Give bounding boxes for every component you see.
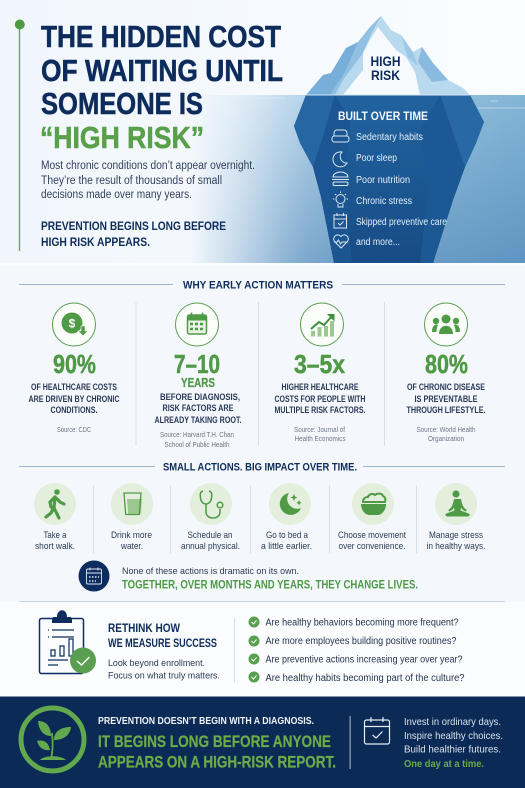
stat: 90%: ARE DRIVEN BY CHRONIC [28, 394, 120, 404]
action: stress [426, 483, 486, 552]
heading: rethink: WE MEASURE SUCCESS [108, 638, 217, 650]
text: look beyond enrollment: Focus on what truly matters. [108, 670, 220, 682]
item: preventive actions: Are preventive actions increasing year over year? [266, 654, 463, 666]
stat: 7-10 years: 7–10 [174, 349, 220, 379]
callout: together: None of these actions is dramatic on its own. [122, 566, 299, 577]
closing message: One day at a time. [404, 758, 484, 770]
label: high risk [370, 54, 400, 83]
prevention statement: HIGH RISK APPEARS. [41, 237, 150, 249]
closing message: Inspire healthy choices. [404, 730, 503, 742]
iceberg [245, 16, 525, 263]
icon: stethoscope [190, 483, 232, 525]
heading: rethink: RETHINK HOW [108, 623, 180, 635]
stat: 7-10 years: School of Public Health [164, 442, 230, 449]
stat: 7-10 years: Source: Harvard T.H. Chan [160, 432, 234, 439]
title: THE HIDDEN COST [41, 19, 281, 54]
stat: 90%: Source: CDC [57, 427, 91, 434]
closing headline: APPEARS ON A HIGH-RISK REPORT. [98, 752, 336, 772]
stat: 3-5x: HIGHER HEALTHCARE [282, 382, 358, 392]
icon: dollar down: $ [69, 316, 76, 330]
action: walk: short walk. [35, 541, 75, 552]
icon: calendar badge [78, 560, 110, 592]
item: sedentary habits: Sedentary habits [356, 132, 423, 143]
water background [190, 95, 525, 263]
intro text: Most chronic conditions don’t appear overnight. [41, 160, 255, 172]
action: water [111, 483, 153, 552]
stat: 7-10 years: RISK FACTORS ARE [162, 403, 234, 413]
item: poor nutrition: Poor nutrition [356, 175, 410, 186]
action: physical: Schedule an [188, 530, 232, 541]
closing headline: PREVENTION DOESN’T BEGIN WITH A DIAGNOSIS. [98, 715, 314, 727]
heading: rethink [108, 623, 217, 650]
stat: 80%: Organization [428, 436, 464, 443]
icon: calendar [176, 303, 218, 346]
panel: footer [0, 696, 525, 788]
stat: 3-5x: COSTS FOR PEOPLE WITH [274, 394, 366, 404]
icon: moon and stars [269, 483, 311, 525]
stat: 3-5x [274, 303, 366, 443]
label: high risk: HIGH [370, 54, 400, 69]
stat: 80% [406, 303, 486, 443]
item: poor sleep: Poor sleep [356, 153, 397, 164]
item: healthy habits: Are healthy habits becoming part of the culture? [266, 673, 465, 684]
closing headline: IT BEGINS LONG BEFORE ANYONE [98, 732, 331, 751]
callout: together: TOGETHER, OVER MONTHS AND YEARS, THEY CHANGE LIVES. [122, 580, 418, 592]
callout: together [78, 560, 418, 592]
stat: 80%: IS PREVENTABLE [414, 394, 478, 404]
action: sleep: a little earlier. [261, 541, 312, 552]
stat: 80%: 80% [425, 349, 468, 379]
panel: rethink success [0, 602, 525, 697]
icon: sprout in ring [21, 708, 84, 771]
stat: 3-5x: Source: Journal of [294, 427, 345, 434]
stat: 80%: THROUGH LIFESTYLE. [406, 405, 486, 415]
action: movement: Choose movement [338, 530, 406, 541]
label: built over time: BUILT OVER TIME [338, 111, 428, 123]
stat: 90%: 90% [53, 349, 96, 379]
intro text: They’re the result of thousands of small [41, 175, 222, 187]
stat: 80%: OF CHRONIC DISEASE [407, 382, 485, 392]
closing message: Invest in ordinary days. [404, 716, 501, 728]
stat: 90% [28, 303, 120, 434]
stat: 3-5x: MULTIPLE RISK FACTORS. [274, 405, 366, 415]
panel: hero [0, 0, 525, 263]
icon: people [424, 303, 468, 346]
action: movement: over convenience. [338, 541, 406, 552]
stat: 7-10 years: ALREADY TAKING ROOT. [154, 415, 242, 425]
title [40, 19, 283, 155]
action: stress: in healthy ways. [426, 541, 486, 552]
title: SOMEONE IS [41, 86, 203, 121]
closing message [404, 716, 503, 770]
stat: 7-10 years [154, 303, 242, 449]
action: walk: Take a [44, 530, 67, 541]
timeline accent [15, 20, 25, 251]
action: physical: annual physical. [181, 541, 240, 552]
icon: clipboard with check [40, 610, 96, 674]
prevention statement [41, 221, 226, 249]
stat: 3-5x: 3–5x [294, 349, 345, 379]
stat: 7-10 years: BEFORE DIAGNOSIS, [160, 392, 240, 402]
icon: meditation [435, 483, 477, 525]
prevention statement: PREVENTION BEGINS LONG BEFORE [41, 221, 226, 233]
action: water: water. [120, 541, 143, 552]
title: OF WAITING UNTIL [41, 53, 283, 88]
item: healthy behaviors: Are healthy behaviors becoming more frequent? [266, 618, 459, 628]
icon: walking person [34, 483, 76, 525]
checklist [248, 616, 465, 684]
icon: salad bowl [352, 483, 394, 525]
heading: why early action matters: WHY EARLY ACTION MATTERS [183, 280, 333, 292]
action: stress: Manage stress [429, 530, 483, 541]
label: high risk: RISK [371, 68, 400, 83]
stat: 7-10 years: YEARS [181, 375, 215, 390]
action: sleep: Go to bed a [266, 530, 309, 541]
text: look beyond enrollment [108, 658, 220, 682]
action: movement [338, 483, 406, 552]
stat: 90%: CONDITIONS. [50, 405, 98, 415]
icon: growth chart [300, 303, 344, 346]
list: contributing factors [332, 130, 447, 248]
closing message: Build healthier futures. [404, 744, 501, 756]
item: chronic stress: Chronic stress [356, 196, 412, 207]
item: skipped preventive care: Skipped preventive care [356, 217, 447, 228]
action: sleep [261, 483, 312, 552]
intro text: decisions made over many years. [41, 189, 192, 201]
action: water: Drink more [111, 530, 152, 541]
action: physical [181, 483, 240, 552]
icon: glass of water [111, 483, 153, 525]
heading: small actions: SMALL ACTIONS. BIG IMPACT OVER TIME. [163, 462, 357, 474]
closing headline [98, 715, 336, 772]
action: walk [34, 483, 76, 552]
icon: calendar check [364, 717, 390, 744]
item: employees: Are more employees building positive routines? [266, 636, 457, 647]
stat: 90%: OF HEALTHCARE COSTS [31, 382, 117, 392]
stat: 3-5x: Health Economics [294, 436, 346, 443]
text: look beyond enrollment: Look beyond enrollment. [108, 658, 205, 669]
stat: 80%: Source: World Health [416, 427, 476, 434]
item: and more: and more... [356, 237, 400, 248]
title: “HIGH RISK” [40, 120, 204, 155]
intro text [41, 160, 255, 201]
